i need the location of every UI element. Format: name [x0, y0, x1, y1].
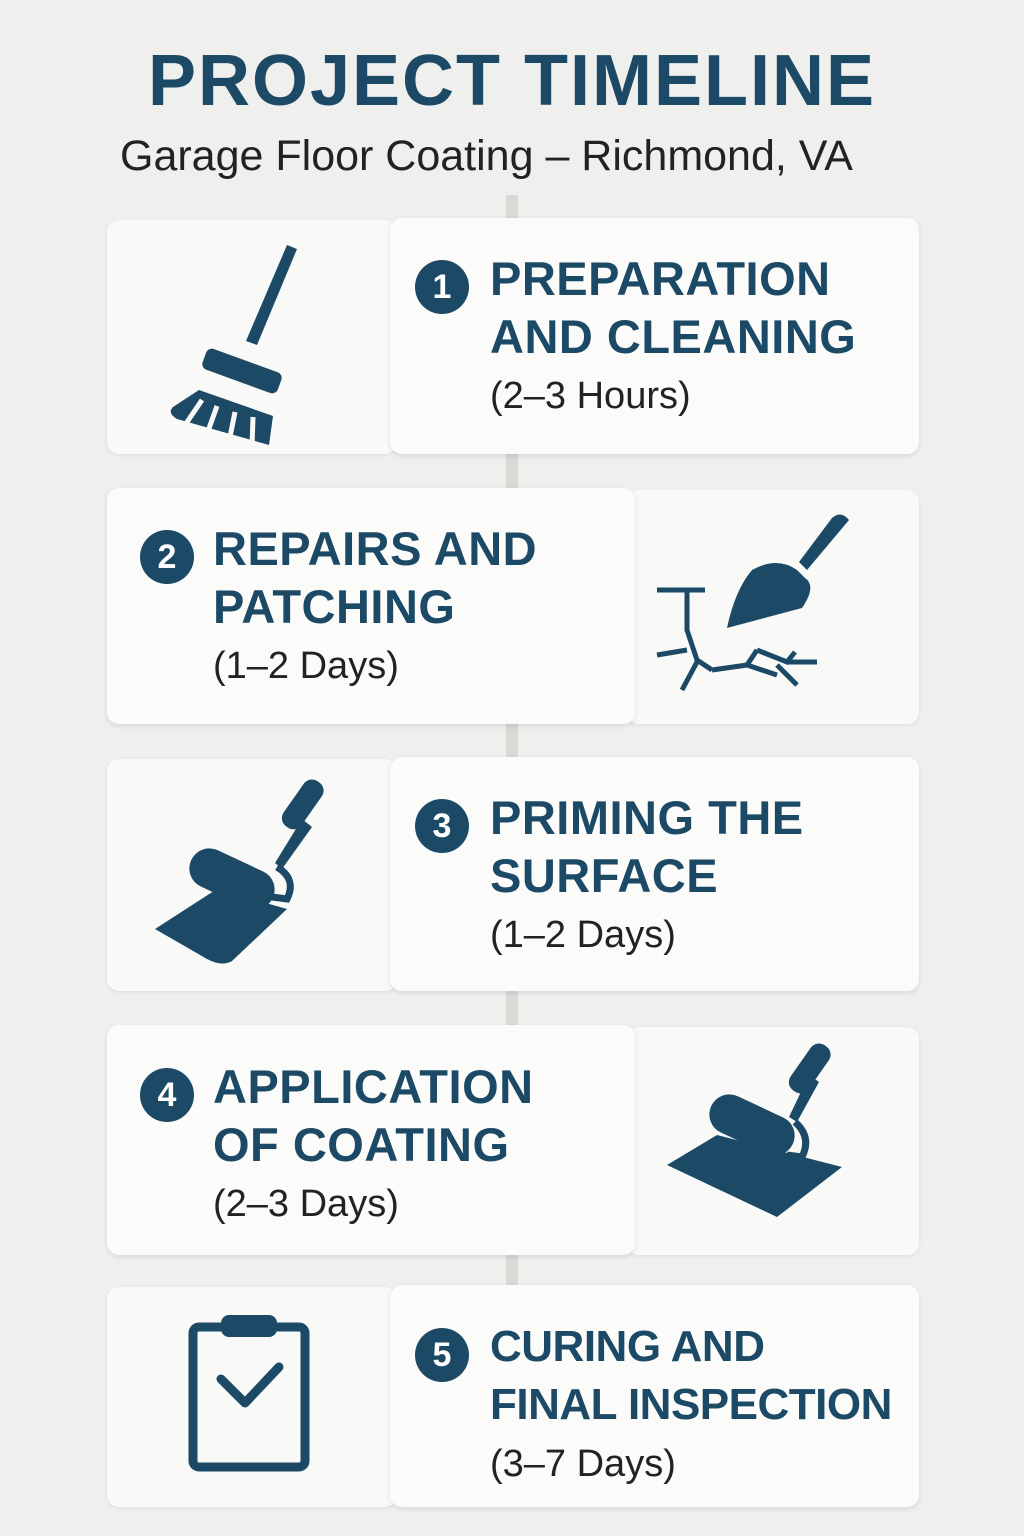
heading 1: (2–3 Hours) [490, 375, 691, 417]
text card 3 [390, 757, 919, 991]
heading 2: REPAIRS AND [213, 522, 537, 575]
icon card: broom [107, 220, 397, 454]
heading 2: PATCHING [213, 580, 455, 633]
heading 5: (3–7 Days) [490, 1443, 676, 1485]
icon card: trowel [627, 490, 919, 724]
heading 5 [490, 1322, 892, 1485]
number 3 [415, 799, 469, 853]
heading 5: CURING AND [490, 1322, 764, 1371]
heading 4: OF COATING [213, 1118, 510, 1171]
icon card: coating roller [627, 1027, 919, 1255]
heading 4: APPLICATION [213, 1060, 534, 1113]
step 5 [106, 1285, 920, 1510]
number 5: 5 [433, 1336, 451, 1374]
number 2 [140, 530, 194, 584]
number 4: 4 [158, 1076, 176, 1114]
timeline line [506, 195, 518, 1295]
text card 2 [107, 488, 635, 724]
heading 2: (1–2 Days) [213, 645, 399, 687]
heading 1: AND CLEANING [490, 310, 856, 363]
number 2: 2 [158, 538, 176, 576]
number 1 [415, 260, 469, 314]
number 5 [415, 1328, 469, 1382]
text card 1 [390, 218, 919, 454]
step 4 [106, 1025, 920, 1258]
heading 3: SURFACE [490, 849, 718, 902]
text card 5 [390, 1285, 919, 1507]
step 1 [106, 218, 920, 457]
text card 4 [107, 1025, 635, 1255]
heading 3 [490, 791, 804, 956]
heading 2 [213, 522, 537, 687]
heading 1 [490, 252, 856, 417]
number 3: 3 [433, 807, 451, 845]
heading 5: FINAL INSPECTION [490, 1380, 892, 1429]
heading 1: PREPARATION [490, 252, 831, 305]
subtitle: Garage Floor Coating – Richmond, VA [120, 132, 853, 180]
title: PROJECT TIMELINE [148, 41, 876, 121]
heading 3: PRIMING THE [490, 791, 804, 844]
step 3 [106, 757, 920, 994]
number 1: 1 [433, 268, 451, 306]
heading 4: (2–3 Days) [213, 1183, 399, 1225]
icon card: clipboard [107, 1287, 397, 1507]
heading 4 [213, 1060, 534, 1225]
heading 3: (1–2 Days) [490, 914, 676, 956]
icon card: roller [107, 759, 397, 991]
step 2 [106, 488, 920, 727]
number 4 [140, 1068, 194, 1122]
